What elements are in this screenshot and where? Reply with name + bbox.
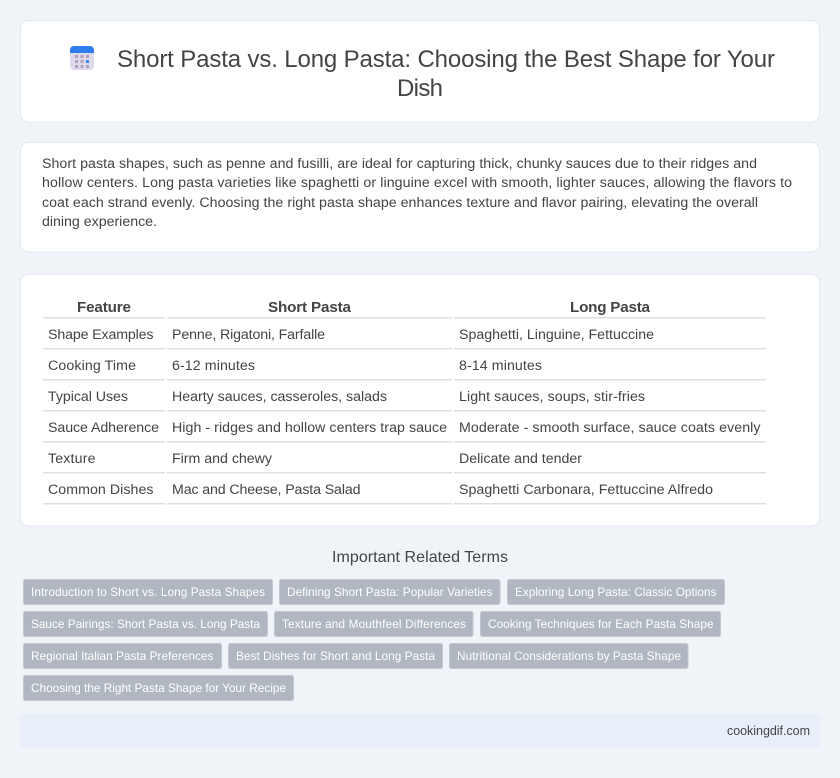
tag: Nutritional Considerations by Pasta Shape	[457, 649, 681, 663]
row: cooking time: 6-12 minutes	[172, 358, 255, 374]
tag	[280, 580, 500, 604]
tag: Exploring Long Pasta: Classic Options	[515, 585, 717, 599]
row: common dishes: Common Dishes	[48, 482, 154, 498]
row: texture: Texture	[48, 451, 96, 467]
tag: Introduction to Short vs. Long Pasta Shapes	[31, 585, 265, 599]
tag	[480, 612, 720, 636]
title: Short Pasta vs. Long Pasta: Choosing the Best Shape for Your	[117, 46, 775, 73]
table header: Feature	[77, 299, 131, 316]
row: typical uses: Hearty sauces, casseroles, salads	[172, 389, 387, 405]
tag: Sauce Pairings: Short Pasta vs. Long Pasta	[31, 617, 260, 631]
icon: calendar	[70, 46, 94, 70]
tag	[228, 644, 442, 668]
title	[117, 46, 775, 102]
tag	[24, 580, 272, 604]
tag: Regional Italian Pasta Preferences	[31, 649, 214, 663]
row: typical uses: Light sauces, soups, stir-fries	[459, 389, 645, 405]
row: typical uses	[48, 389, 645, 405]
table header: Long Pasta	[570, 299, 651, 316]
row: sauce adherence: Moderate - smooth surface, sauce coats evenly	[459, 420, 761, 436]
row: texture: Delicate and tender	[459, 451, 582, 467]
intro paragraph: Short pasta shapes, such as penne and fusilli, are ideal for capturing thick, chunky sauces due to their ridges and	[42, 156, 757, 172]
table header	[77, 299, 651, 316]
row: shape examples: Penne, Rigatoni, Farfalle	[172, 327, 325, 343]
tag	[508, 580, 724, 604]
intro paragraph: coat each strand evenly. Choosing the right pasta shape enhances texture and flavor pairing, elevating the overall	[42, 195, 758, 211]
row: sauce adherence: Sauce Adherence	[48, 420, 159, 436]
row: common dishes	[48, 482, 713, 498]
panel: introduction	[20, 142, 820, 252]
row: shape examples: Shape Examples	[48, 327, 154, 343]
row: common dishes: Mac and Cheese, Pasta Salad	[172, 482, 360, 498]
tag	[24, 612, 268, 636]
tag: Texture and Mouthfeel Differences	[282, 617, 466, 631]
tag: Defining Short Pasta: Popular Varieties	[287, 585, 493, 599]
related terms tags	[24, 580, 724, 700]
panel: header	[20, 20, 820, 122]
row: cooking time: 8-14 minutes	[459, 358, 542, 374]
row: cooking time: Cooking Time	[48, 358, 136, 374]
row: cooking time	[48, 358, 542, 374]
tag: Best Dishes for Short and Long Pasta	[236, 649, 435, 663]
table header: Short Pasta	[268, 299, 352, 316]
tag	[274, 612, 473, 636]
panel: comparison table	[20, 274, 820, 526]
tag	[450, 644, 688, 668]
row: shape examples: Spaghetti, Linguine, Fettuccine	[459, 327, 654, 343]
intro paragraph: dining experience.	[42, 214, 157, 230]
row: common dishes: Spaghetti Carbonara, Fettuccine Alfredo	[459, 482, 713, 498]
heading: related terms: Important Related Terms	[332, 549, 508, 566]
tag: Choosing the Right Pasta Shape for Your Recipe	[31, 681, 286, 695]
footer	[20, 714, 820, 748]
footer: cookingdif.com	[727, 724, 810, 738]
tag	[24, 676, 294, 700]
row: typical uses: Typical Uses	[48, 389, 128, 405]
row: sauce adherence: High - ridges and hollow centers trap sauce	[172, 420, 447, 436]
tag: Cooking Techniques for Each Pasta Shape	[488, 617, 714, 631]
tag	[24, 644, 222, 668]
title: Dish	[397, 75, 443, 102]
intro paragraph: hollow centers. Long pasta varieties like spaghetti or linguine excel with smooth, lighter sauces, allowing the flavors to	[42, 175, 792, 191]
row: sauce adherence	[48, 420, 761, 436]
row: texture: Firm and chewy	[172, 451, 273, 467]
intro paragraph	[42, 156, 792, 230]
row: shape examples	[48, 327, 654, 343]
row: texture	[48, 451, 582, 467]
